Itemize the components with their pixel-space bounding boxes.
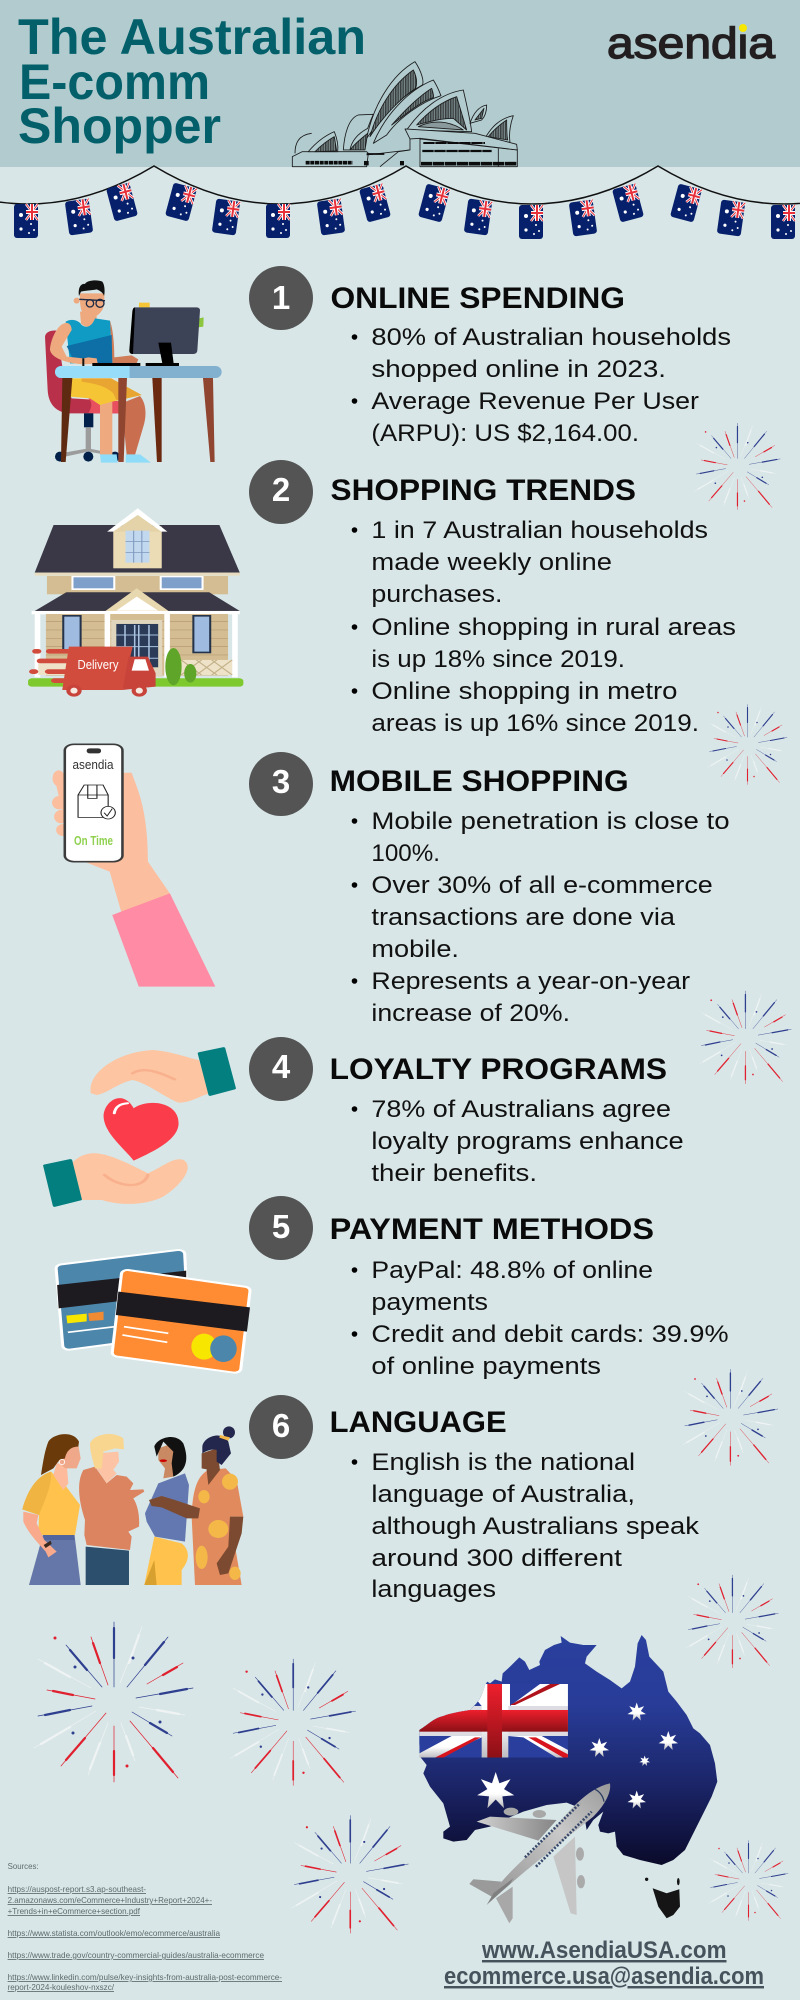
heading: loyalty programs: LOYALTY PROGRAMS [330,1053,667,1086]
heading: mobile shopping: MOBILE SHOPPING [330,765,629,798]
bullet list: shopping trends: purchases. [371,581,502,608]
bullet list: loyalty programs: loyalty programs enhance [371,1128,684,1155]
bullet list: online spending: (ARPU): US $2,164.00. [371,420,639,447]
bullet list: online spending [352,324,731,447]
icon: hand holding phone: On Time [74,833,113,848]
bullet list: mobile shopping: Mobile penetration is close to [371,808,730,835]
bullet list: shopping trends: made weekly online [371,549,612,576]
heading: shopping trends: SHOPPING TRENDS [330,474,636,507]
bunting flags [14,182,795,239]
bullet list: shopping trends: Online shopping in metro [371,678,678,705]
title: Shopper [18,98,221,154]
number badge 2: 2 [272,471,290,508]
number badge 5: 5 [272,1208,290,1245]
number badge 1 [249,266,313,330]
icon: Sydney Opera House [292,62,517,167]
bullet list: language [352,1449,700,1603]
number badge 2 [249,460,313,524]
title [18,9,366,154]
logo: asendia: asendia [607,19,776,68]
contact links: ecommerce.usa@asendia.com [444,1963,764,1990]
bullet list: language: although Australians speak [371,1513,700,1540]
bullet list: mobile shopping: mobile. [371,936,459,963]
bullet list: mobile shopping: 100%. [371,840,440,867]
bullet list: mobile shopping: transactions are done via [371,904,675,931]
icon: person at computer [45,280,222,463]
panel: shopping trends [249,460,736,737]
fireworks [34,423,791,1933]
icon: Australia map with flag [419,1635,717,1918]
contact links: www.AsendiaUSA.com [481,1937,726,1964]
icon: house with delivery truck [28,508,243,697]
bullet list: payment methods: Credit and debit cards: 39.9% [371,1321,729,1348]
number badge 4: 4 [272,1048,291,1085]
bullet list: mobile shopping: Represents a year-on-year [371,968,690,995]
title: E-comm [19,54,210,110]
sources [8,1861,282,1992]
icon: hands with heart [45,1048,234,1206]
number badge 5 [249,1196,313,1260]
contact links [444,1937,764,1990]
icon: payment cards [57,1254,250,1369]
heading: payment methods: PAYMENT METHODS [330,1213,654,1246]
sources: 2.amazonaws.com/eCommerce+Industry+Report+2024+- [8,1895,212,1905]
bullet list: shopping trends: 1 in 7 Australian households [371,517,708,544]
panel: mobile shopping [249,752,730,1027]
bullet list: loyalty programs: their benefits. [371,1160,537,1187]
sources: Sources: [8,1861,39,1871]
bullet list: mobile shopping [352,808,730,1027]
title: The Australian [18,9,366,65]
bullet list: online spending: 80% of Australian households [371,324,731,351]
sources: https://auspost-report.s3.ap-southeast- [8,1884,146,1894]
bullet list: loyalty programs: 78% of Australians agree [371,1096,671,1123]
number badge 3: 3 [272,763,290,800]
bullet list: loyalty programs [352,1096,684,1187]
sources: https://www.linkedin.com/pulse/key-insights-from-australia-post-ecommerce- [8,1972,282,1982]
bullet list: language: languages [371,1576,496,1603]
bullet list: mobile shopping: Over 30% of all e-commerce [371,872,713,899]
number badge 6 [249,1395,313,1459]
bullet list: mobile shopping: increase of 20%. [371,1000,570,1027]
bullet list: shopping trends [352,517,736,737]
icon: airplane [469,1783,610,1923]
bullet list: shopping trends: is up 18% since 2019. [371,646,625,673]
number badge 3 [249,752,313,816]
heading: language: LANGUAGE [330,1406,507,1439]
bullet list: shopping trends: Online shopping in rural areas [371,614,736,641]
icon: group of people talking [22,1426,243,1585]
sources: https://www.trade.gov/country-commercial-guides/australia-ecommerce [8,1950,264,1960]
number badge 6: 6 [272,1407,290,1444]
number badge 1: 1 [272,279,290,316]
panel: online spending [249,266,731,447]
bullet list: payment methods [352,1257,729,1380]
heading: online spending: ONLINE SPENDING [330,282,625,315]
sources: report-2024-kouleshov-nxszc/ [8,1982,115,1992]
sources: +Trends+in+eCommerce+section.pdf [8,1906,141,1916]
bullet list: payment methods: PayPal: 48.8% of online [371,1257,653,1284]
bullet list: language: around 300 different [371,1545,622,1572]
bullet list: language: language of Australia, [371,1481,635,1508]
bullet list: shopping trends: areas is up 16% since 2019. [371,710,699,737]
bullet list: payment methods: of online payments [371,1353,601,1380]
icon: house with delivery truck: Delivery [78,657,119,672]
icon: hand holding phone: asendia [72,758,114,772]
bullet list: language: English is the national [371,1449,635,1476]
bullet list: payment methods: payments [371,1289,488,1316]
sources: https://www.statista.com/outlook/emo/ecommerce/australia [8,1928,220,1938]
bunting string [0,166,800,204]
panel: language [249,1395,700,1603]
panel: payment methods [249,1196,729,1380]
number badge 4 [249,1037,313,1101]
bullet list: online spending: Average Revenue Per User [371,388,699,415]
bullet list: online spending: shopped online in 2023. [371,356,666,383]
panel: loyalty programs [249,1037,684,1187]
icon: hand holding phone [52,744,215,987]
header band [0,0,800,167]
